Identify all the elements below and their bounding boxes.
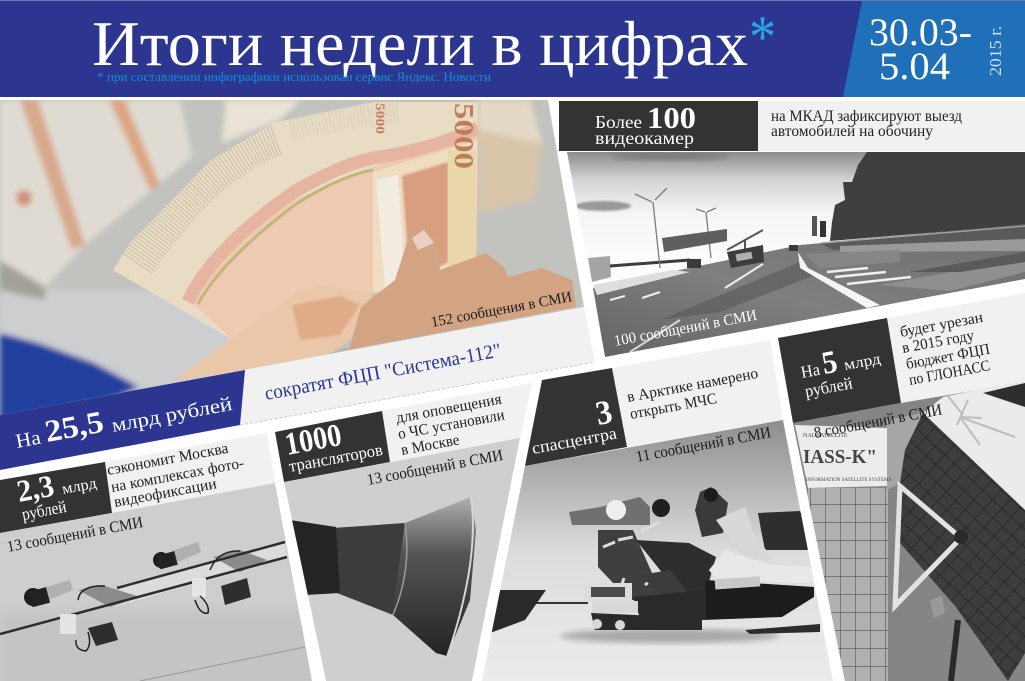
figure: 5 billion: рублей (803, 374, 854, 401)
label: 13 messages: 13 сообщений в СМИ (366, 447, 505, 489)
date range: 5.04 (879, 45, 950, 88)
label: 152 messages: 152 сообщения в СМИ (430, 289, 573, 331)
figure: 1000 transmitters: трансляторов (287, 440, 384, 476)
figure: 3 rescue centres: спасцентра (530, 423, 619, 458)
text: GLONASS budget (899, 309, 991, 389)
text: GLONASS budget: по ГЛОНАСС (908, 357, 991, 389)
text: FCP Sistema-112: сократят ФЦП "Система-112" (263, 340, 503, 405)
text: emergency notification: о ЧС установили (397, 407, 506, 443)
text: MKAD: автомобилей на обочину (771, 123, 933, 140)
panel: GLONASS (778, 293, 1025, 681)
text: MKAD (771, 108, 962, 140)
figure: 100 video cameras: 100 (647, 100, 696, 135)
figure: 100 video cameras: Более (595, 112, 642, 132)
label: 13 messages: 13 сообщений в СМИ (6, 514, 145, 556)
label: 8 messages: 8 сообщений в СМИ (813, 401, 944, 442)
figure: 5 billion: млрд (843, 350, 882, 374)
photo: megaphone (284, 438, 520, 681)
figure: 1000 transmitters: 1000 (282, 416, 344, 462)
figure: 25,5 billion: млрд рублей (110, 393, 234, 437)
text: Moscow savings: сэкономит Москва (106, 440, 230, 479)
title asterisk: * (749, 4, 776, 70)
date range: 30.03- (869, 11, 972, 54)
photo: snowmobile (480, 420, 840, 681)
year: 2015 г. (986, 26, 1005, 76)
text: emergency notification: в Москве (400, 431, 461, 459)
figure: 2,3 billion: 2,3 (14, 468, 57, 509)
text: MChS Arctic: в Арктике намерено (626, 365, 760, 406)
figure: 25,5 billion: 25,5 (42, 404, 106, 449)
header banner (0, 0, 1025, 97)
panel: photo-video cameras, 2,3 bn (0, 433, 320, 681)
photo: satellite (790, 380, 1025, 681)
text: Moscow savings: видеофиксации (113, 475, 218, 511)
text: MChS Arctic: открыть МЧС (629, 390, 718, 423)
figure: 25,5 billion: На (14, 427, 43, 453)
figure: 2,3 billion (14, 468, 98, 524)
figure: 2,3 billion: млрд (61, 475, 98, 498)
figure: 3 rescue centres: 3 (593, 394, 615, 433)
photo: satellite: INFORMATION SATELLITE SYSTEMS (806, 478, 892, 483)
title: Итоги недели в цифрах (92, 8, 748, 79)
text: emergency notification (395, 391, 506, 459)
footnote: * при составлении инфографики использован сервис Яндекс. Новости (97, 69, 491, 84)
date range (869, 11, 972, 88)
figure: 1000 transmitters (282, 416, 384, 476)
text: GLONASS budget: в 2015 году (901, 327, 976, 357)
figure: 5 billion (799, 343, 882, 401)
panel: loudspeakers, 1000 (275, 383, 532, 681)
photo: satellite: NAL SATELLITE (803, 433, 848, 439)
label: 100 messages: 100 сообщений в СМИ (613, 307, 758, 350)
photo: traffic cameras (0, 483, 320, 681)
panel: Arctic rescue centres (480, 340, 840, 681)
figure: 5 billion: На (799, 360, 822, 382)
text: Moscow savings: на комплексах фото- (110, 455, 245, 496)
icon: hand (332, 240, 576, 353)
icon: banknote fan: 5000 (373, 103, 388, 134)
text: emergency notification: для оповещения (395, 391, 503, 427)
figure: 5 billion: 5 (819, 343, 840, 381)
figure: 2,3 billion: рублей (20, 497, 68, 524)
panel: banknotes photo (0, 100, 590, 425)
blurred background stacks (0, 100, 542, 425)
figure: 100 video cameras: видеокамер (595, 128, 694, 148)
text: GLONASS budget: бюджет ФЦП (905, 341, 991, 373)
panel: road cameras (559, 100, 1025, 357)
icon: banknote fan (113, 102, 479, 340)
icon: banknote fan: 5000 (449, 103, 479, 169)
figure: 3 rescue centres (530, 394, 619, 458)
icon: held banknotes (173, 285, 373, 380)
label: 11 messages: 11 сообщений в СМИ (635, 424, 773, 466)
text: MKAD: на МКАД зафиксируют выезд (771, 108, 962, 125)
figure: 100 video cameras (595, 100, 696, 148)
text: Moscow savings (106, 440, 245, 511)
figure: 25,5 billion (14, 393, 234, 453)
photo: satellite: IASS-K" (803, 446, 877, 468)
photo: highway (560, 152, 1025, 357)
text: GLONASS budget: будет урезан (899, 309, 984, 341)
panel: headline strip, 25,5 bn (0, 307, 595, 470)
